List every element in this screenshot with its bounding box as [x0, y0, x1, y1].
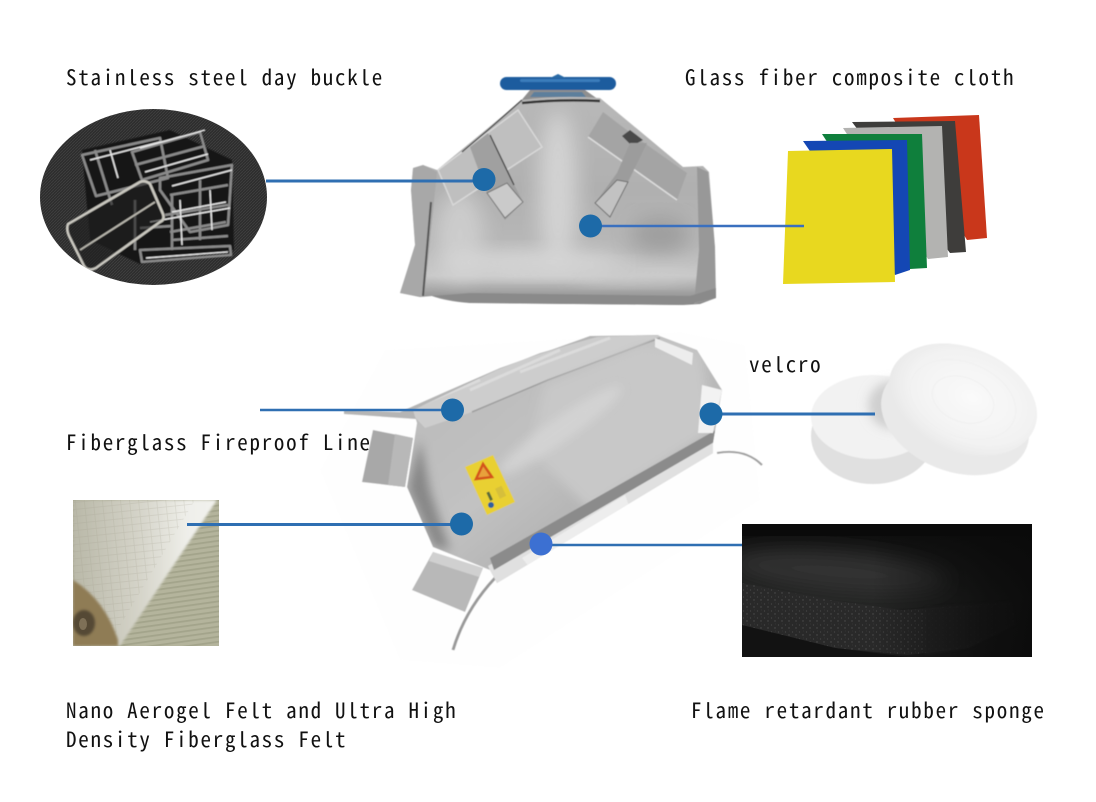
swatch: black	[852, 121, 966, 253]
image: aerogel felt roll	[73, 500, 219, 646]
swatch: red	[893, 115, 987, 240]
image: velcro rolls	[811, 323, 1054, 496]
warning label	[465, 455, 515, 515]
swatch: grey	[843, 126, 948, 259]
side tab	[362, 430, 413, 487]
callout: stainless steel buckle pointer	[266, 168, 496, 191]
callout: aerogel felt pointer	[187, 512, 473, 536]
heading: flame retardant rubber sponge: Flame retardant rubber sponge	[691, 695, 1046, 725]
strap flaps left	[440, 113, 530, 190]
heading: nano aerogel felt: Density Fiberglass Felt	[66, 724, 347, 754]
back edge	[344, 335, 660, 420]
swatch: blue	[803, 140, 910, 275]
cable	[453, 578, 495, 650]
heading: glass fiber composite cloth: Glass fiber composite cloth	[685, 62, 1015, 92]
callout: rubber sponge pointer	[530, 532, 742, 556]
image: flame retardant rubber sponge	[729, 524, 1032, 657]
heading: nano aerogel felt: Nano Aerogel Felt and Ultra High	[66, 695, 457, 725]
bottom tab	[412, 552, 483, 612]
heading: fiberglass fireproof line: Fiberglass Fireproof Line	[66, 427, 372, 457]
swatch: green	[822, 134, 927, 269]
illustration: top valve jacket	[400, 74, 716, 305]
heading: velcro: velcro	[749, 349, 822, 379]
right roll	[864, 323, 1054, 496]
image: stainless steel buckles	[40, 109, 267, 285]
heading: stainless steel day buckle: Stainless steel day buckle	[66, 62, 384, 92]
left roll	[811, 375, 935, 484]
illustration: lower pipe jacket	[344, 334, 763, 651]
swatch: yellow	[783, 149, 895, 284]
callout: fireproof line pointer	[260, 398, 464, 422]
strap flaps right	[588, 112, 687, 200]
callout: glass fiber cloth pointer	[579, 214, 804, 238]
icon: blue handwheel	[500, 74, 616, 102]
image: colored glass fiber cloth swatches	[783, 115, 987, 284]
callout: velcro pointer	[700, 402, 875, 426]
